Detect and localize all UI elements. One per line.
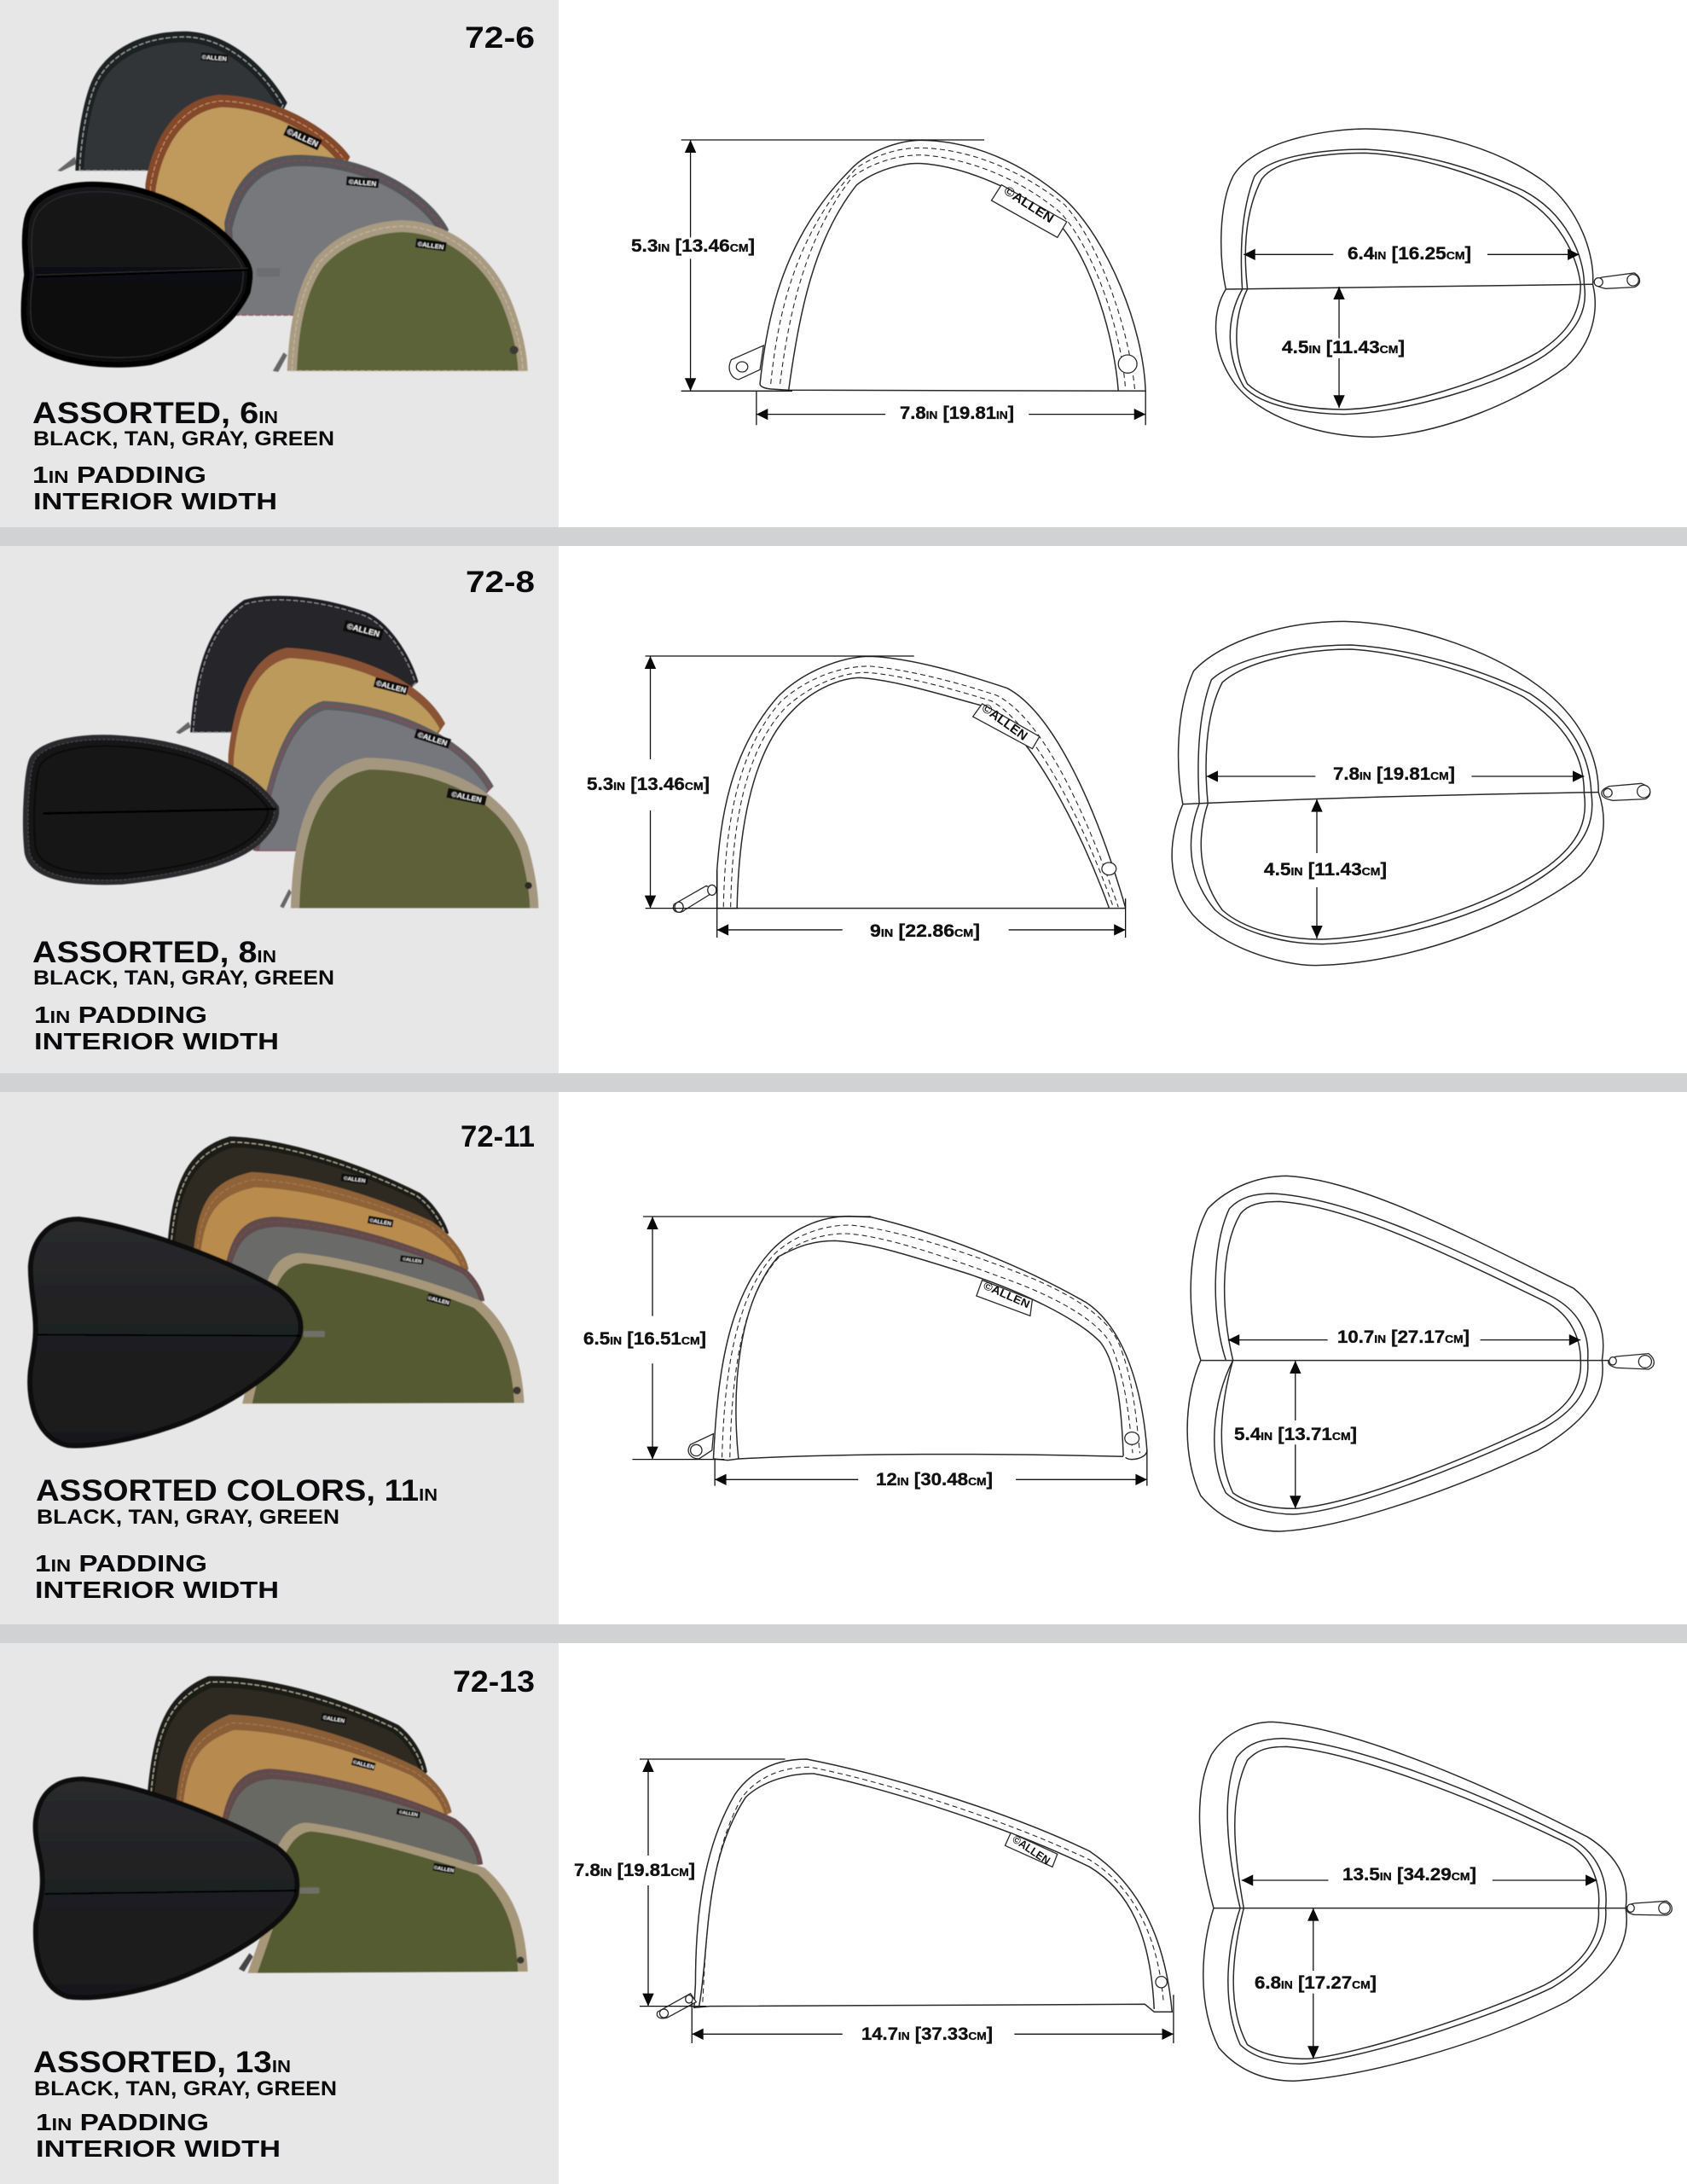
text: padding: 1IN PADDING bbox=[35, 1550, 207, 1577]
photo: 72-13 assorted cases: ©ALLEN bbox=[433, 1865, 455, 1874]
photo: 72-6 assorted cases: ©ALLEN bbox=[285, 127, 320, 149]
dimension: interior height: 4.5IN [11.43 CM] bbox=[1264, 860, 1387, 880]
dimension: interior width: 13.5IN [34.29 CM] bbox=[1342, 1865, 1476, 1885]
text: colors: BLACK, TAN, GRAY, GREEN bbox=[34, 2077, 337, 2100]
panel: 72-11 product bbox=[0, 1092, 559, 1625]
panel: 72-6 product bbox=[0, 0, 559, 527]
photo: 72-8 assorted cases bbox=[26, 595, 538, 909]
photo: 72-13 assorted cases: ©ALLEN bbox=[352, 1759, 375, 1770]
photo: 72-13 assorted cases: ©ALLEN bbox=[322, 1715, 345, 1724]
photo: 72-11 assorted cases: ©ALLEN bbox=[344, 1176, 366, 1184]
diagram: 72-6 dimensions bbox=[631, 129, 1640, 437]
text: interior width: INTERIOR WIDTH bbox=[34, 1028, 279, 1054]
photo: 72-8 assorted cases: ©ALLEN bbox=[345, 622, 380, 639]
panel: 72-13 product bbox=[0, 1643, 559, 2184]
text: colors: BLACK, TAN, GRAY, GREEN bbox=[37, 1506, 339, 1529]
model number 72-11: 72-11 bbox=[461, 1120, 535, 1153]
dimension: width: 7.8IN [19.81 IN] bbox=[900, 404, 1014, 423]
divider bar 2 bbox=[0, 1073, 1687, 1092]
dimension: interior height: 5.4IN [13.71 CM] bbox=[1234, 1425, 1357, 1444]
photo: 72-11 assorted cases: ©ALLEN bbox=[369, 1217, 392, 1227]
dimension: interior width: 7.8IN [19.81 CM] bbox=[1333, 764, 1455, 784]
dimension: width: 9IN [22.86 CM] bbox=[870, 921, 980, 941]
photo: 72-11 assorted cases: ©ALLEN bbox=[403, 1256, 422, 1264]
photo: 72-6 assorted cases: ©ALLEN bbox=[417, 240, 444, 251]
side view line drawing bbox=[640, 1759, 1174, 2043]
dimension: interior height: 4.5IN [11.43 CM] bbox=[1282, 338, 1405, 357]
dimension: width: 14.7IN [37.33 CM] bbox=[861, 2024, 993, 2044]
text: interior width: INTERIOR WIDTH bbox=[35, 1577, 279, 1603]
text: product title: ASSORTED, 6 IN bbox=[32, 397, 278, 430]
side view line drawing bbox=[645, 656, 1126, 938]
photo: 72-8 assorted cases: ©ALLEN bbox=[450, 790, 483, 804]
photo: 72-13 assorted cases bbox=[36, 1676, 528, 1997]
text: interior width: INTERIOR WIDTH bbox=[33, 488, 277, 514]
photo: 72-11 assorted cases bbox=[30, 1136, 525, 1446]
text: colors: BLACK, TAN, GRAY, GREEN bbox=[33, 427, 334, 450]
top-down open view line drawing bbox=[1187, 1176, 1654, 1531]
photo: 72-6 assorted cases bbox=[24, 32, 528, 372]
brand tag text: ©ALLEN bbox=[1010, 1833, 1052, 1867]
brand tag text: ©ALLEN bbox=[979, 700, 1030, 744]
text: padding: 1IN PADDING bbox=[32, 462, 206, 488]
dimension: width: 12IN [30.48 CM] bbox=[876, 1470, 993, 1490]
dimension: height: 5.3IN [13.46 CM] bbox=[587, 775, 710, 794]
text: padding: 1IN PADDING bbox=[34, 1002, 207, 1028]
side view line drawing bbox=[633, 1217, 1147, 1486]
side view line drawing bbox=[681, 140, 1145, 425]
model number 72-8: 72-8 bbox=[466, 566, 535, 599]
photo: 72-6 assorted cases: ©ALLEN bbox=[348, 178, 377, 188]
divider bar 1 bbox=[0, 527, 1687, 546]
photo: 72-13 assorted cases: ©ALLEN bbox=[398, 1809, 419, 1818]
panel: 72-8 product bbox=[0, 546, 559, 1073]
dimension: interior height: 6.8IN [17.27 CM] bbox=[1255, 1973, 1377, 1993]
text: interior width: INTERIOR WIDTH bbox=[36, 2135, 281, 2162]
text: colors: BLACK, TAN, GRAY, GREEN bbox=[33, 967, 334, 990]
diagram: 72-13 dimensions bbox=[574, 1722, 1672, 2081]
text: product title: ASSORTED, 8 IN bbox=[32, 936, 276, 969]
text: product title: ASSORTED, 13 IN bbox=[33, 2046, 291, 2079]
model number 72-13: 72-13 bbox=[453, 1665, 535, 1699]
dimension: interior width: 10.7IN [27.17 CM] bbox=[1337, 1327, 1470, 1347]
divider bar 3 bbox=[0, 1624, 1687, 1643]
photo: 72-8 assorted cases: ©ALLEN bbox=[416, 730, 449, 747]
photo: 72-6 assorted cases: ©ALLEN bbox=[201, 54, 227, 62]
brand tag text: ©ALLEN bbox=[982, 1279, 1032, 1310]
text: product title: ASSORTED COLORS, 11 IN bbox=[36, 1474, 438, 1507]
dimension: height: 5.3IN [13.46 CM] bbox=[631, 236, 755, 256]
brand tag text: ©ALLEN bbox=[1001, 183, 1056, 226]
dimension: height: 7.8IN [19.81 CM] bbox=[574, 1861, 695, 1880]
text: padding: 1IN PADDING bbox=[36, 2109, 209, 2135]
dimension: height: 6.5IN [16.51 CM] bbox=[583, 1329, 706, 1349]
top-down open view line drawing bbox=[1200, 1722, 1672, 2081]
photo: 72-8 assorted cases: ©ALLEN bbox=[375, 679, 407, 694]
top-down open view line drawing bbox=[1172, 621, 1650, 966]
model number 72-6: 72-6 bbox=[465, 21, 535, 55]
diagram: 72-11 dimensions bbox=[583, 1176, 1654, 1531]
top-down open view line drawing bbox=[1216, 129, 1640, 437]
photo: 72-11 assorted cases: ©ALLEN bbox=[427, 1295, 450, 1306]
dimension: interior width: 6.4IN [16.25 CM] bbox=[1348, 244, 1471, 264]
diagram: 72-8 dimensions bbox=[587, 621, 1650, 966]
